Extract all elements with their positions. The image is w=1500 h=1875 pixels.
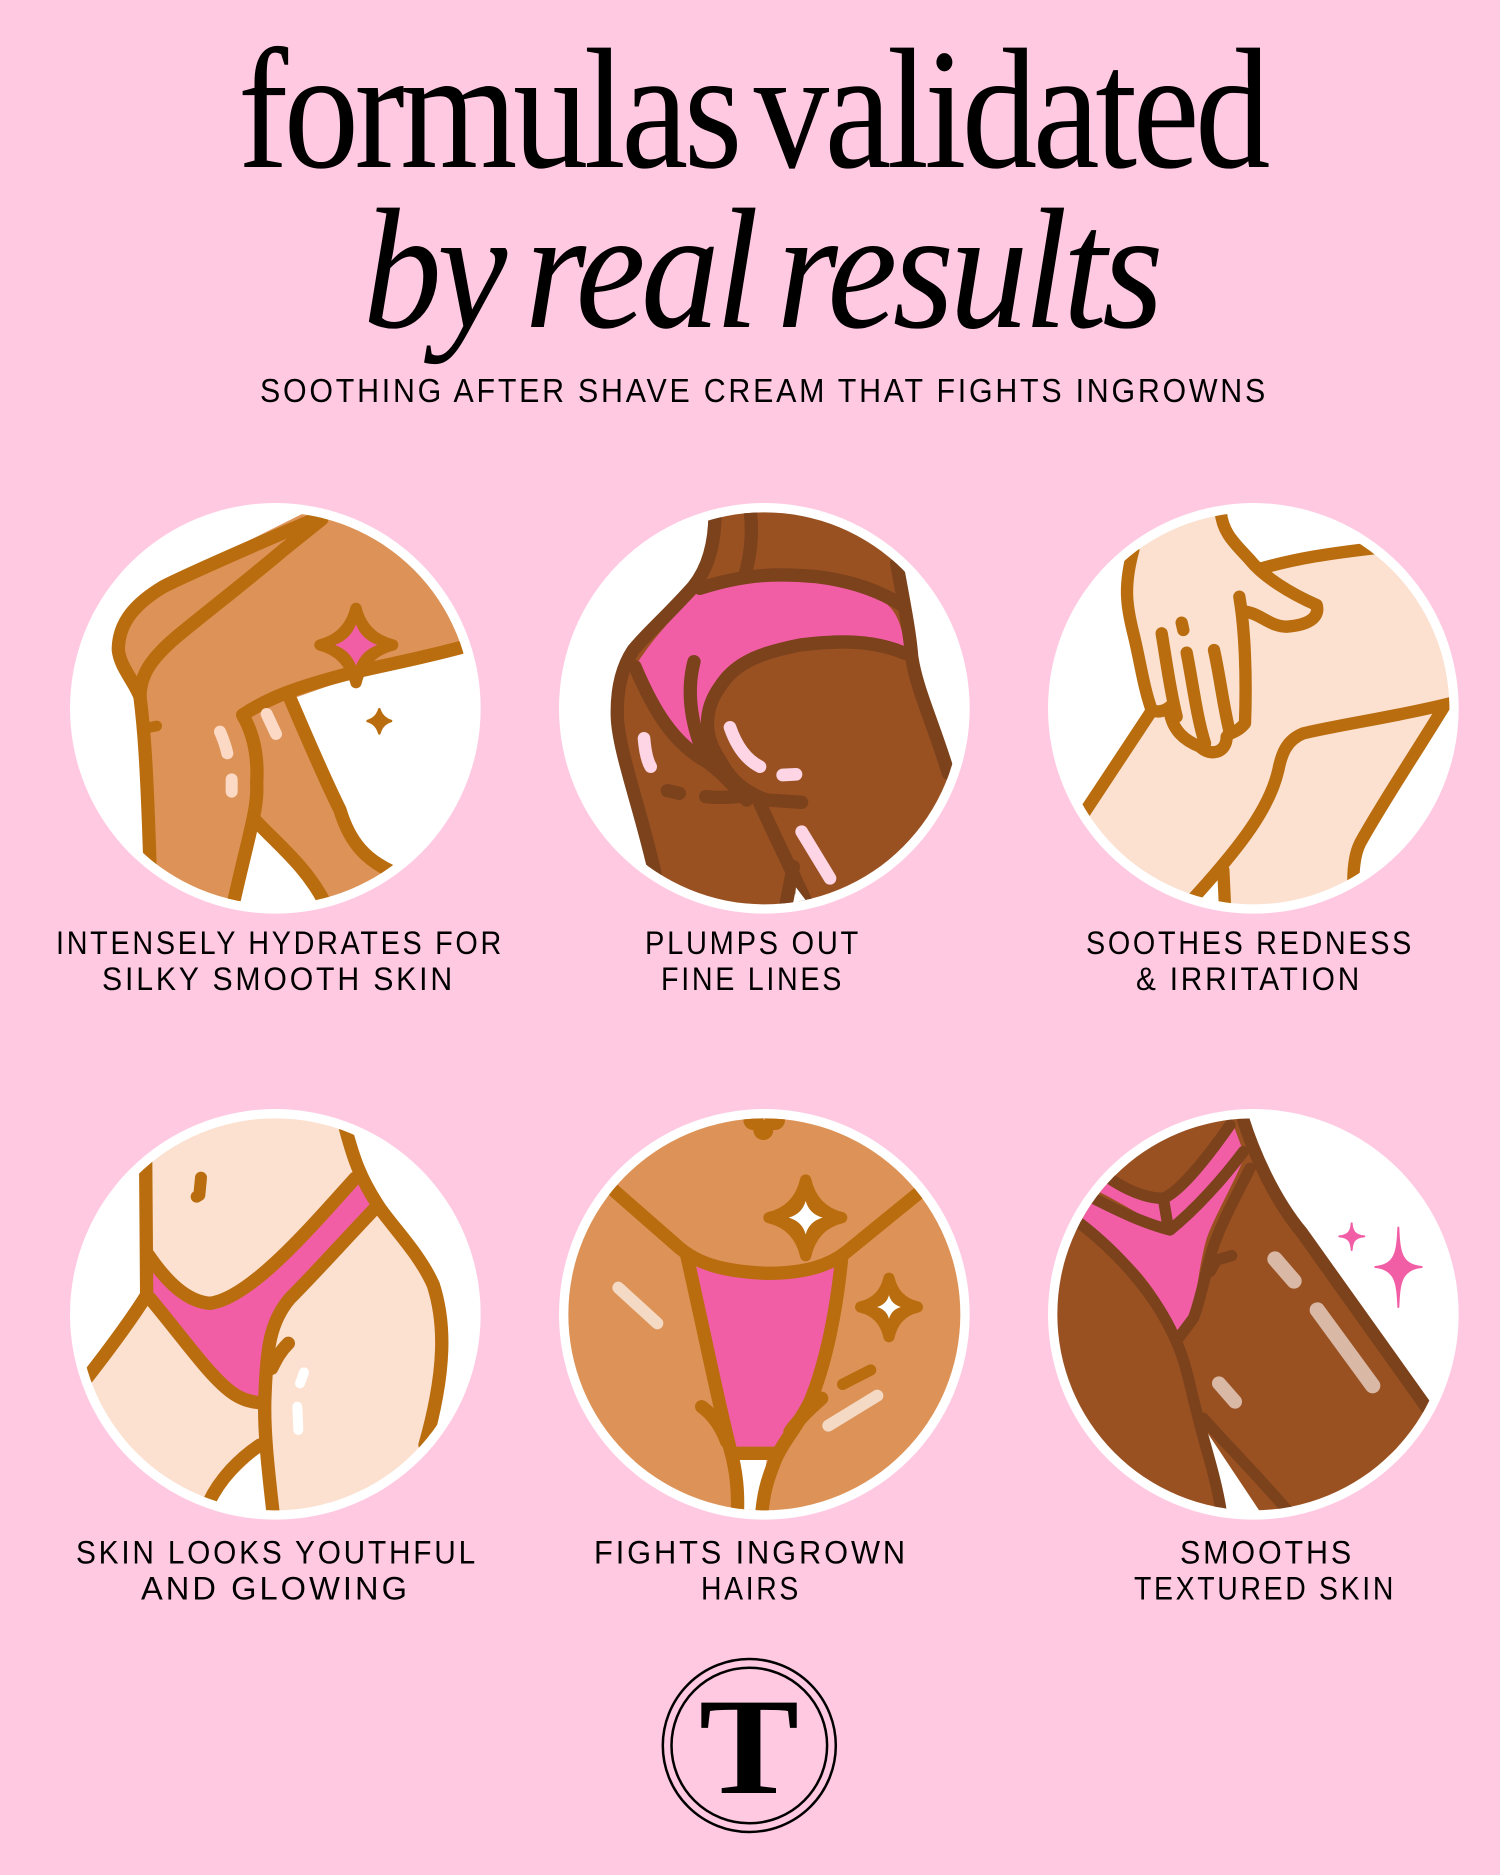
caption: plumps: PLUMPS OUT (645, 925, 861, 961)
caption: plumps (645, 925, 861, 997)
icon: medium sparkle (861, 1278, 917, 1337)
bikini (635, 581, 905, 753)
icon: large sparkle (769, 1180, 842, 1256)
caption: hydrates: INTENSELY HYDRATES FOR (56, 925, 504, 961)
highlights (644, 727, 830, 878)
title: by real results (363, 175, 1159, 365)
panel: textured skin illustration (1048, 1109, 1459, 1520)
icon: navel (743, 1118, 785, 1140)
caption: hydrates: SILKY SMOOTH SKIN (102, 961, 455, 997)
caption: soothes (1086, 925, 1414, 997)
highlights (220, 714, 276, 792)
caption: soothes: & IRRITATION (1136, 961, 1362, 997)
caption: textured: SMOOTHS (1180, 1534, 1354, 1570)
bikini (696, 1267, 834, 1447)
caption: youthful: SKIN LOOKS YOUTHFUL (76, 1534, 478, 1570)
caption: soothes: SOOTHES REDNESS (1086, 925, 1414, 961)
panel: hydrates knee illustration (70, 503, 481, 914)
caption: plumps: FINE LINES (661, 961, 844, 997)
title (238, 15, 1269, 365)
crotch gap (795, 888, 806, 902)
logo: circled T (663, 1659, 836, 1832)
panel: ingrown front illustration (559, 1109, 970, 1520)
bikini (153, 1184, 370, 1396)
caption: hydrates (56, 925, 504, 997)
logo: circled T: T (699, 1670, 799, 1823)
highlights (618, 1288, 877, 1426)
icon: large sparkle (320, 608, 393, 683)
caption: youthful: AND GLOWING (141, 1570, 410, 1606)
caption: textured (1134, 1534, 1396, 1606)
icon: small pink sparkle (1339, 1223, 1364, 1250)
subtitle: SOOTHING AFTER SHAVE CREAM THAT FIGHTS INGROWNS (260, 372, 1268, 409)
gap (740, 1460, 767, 1510)
bikini (1080, 1125, 1247, 1338)
title: formulas validated (238, 15, 1269, 205)
panel: plumps back illustration (559, 503, 973, 923)
caption: ingrown (594, 1534, 908, 1606)
caption: textured: TEXTURED SKIN (1134, 1570, 1396, 1606)
icon: large pink sparkle (1375, 1228, 1422, 1307)
highlights (297, 1372, 304, 1430)
highlights (1219, 1259, 1373, 1402)
panel: soothes hand on thigh illustration (1048, 503, 1480, 923)
caption: ingrown: HAIRS (701, 1570, 801, 1606)
caption: ingrown: FIGHTS INGROWN (594, 1534, 908, 1570)
icon: small sparkle (368, 709, 391, 733)
panel: youthful torso illustration (50, 1095, 481, 1528)
caption: youthful (76, 1534, 478, 1606)
